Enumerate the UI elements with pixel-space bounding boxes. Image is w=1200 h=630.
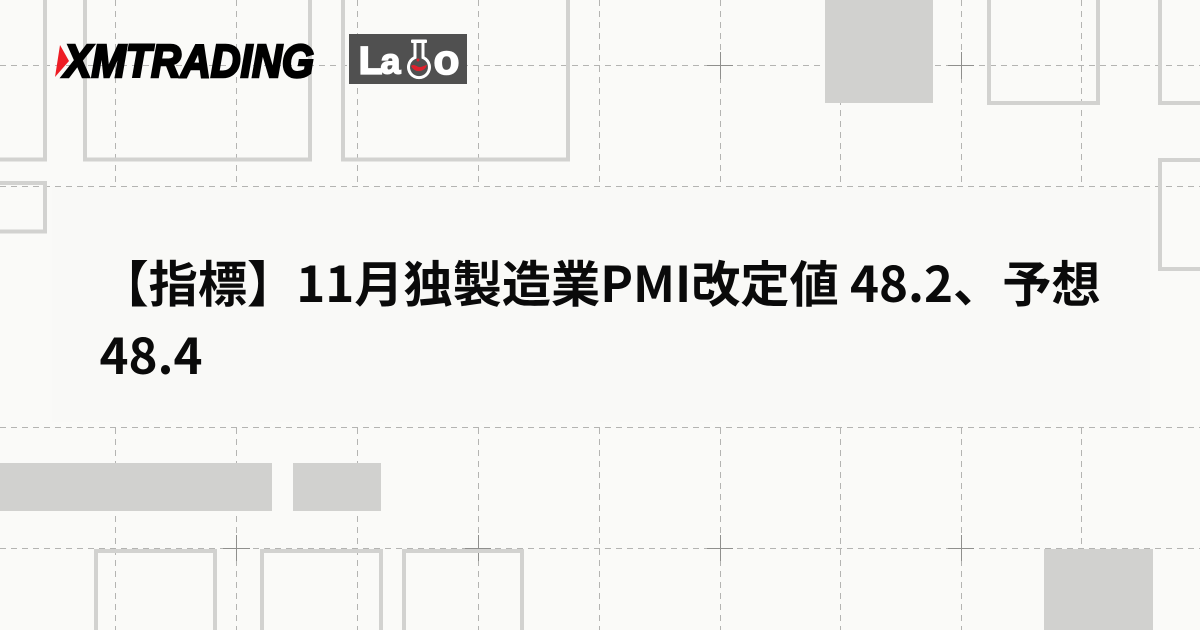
icon: red arrow mark xyxy=(55,45,69,77)
logo: Lab xyxy=(349,34,467,84)
icon: flask xyxy=(407,40,431,79)
letters L and a: L xyxy=(359,40,382,82)
letter o: o xyxy=(434,36,460,83)
logo: XMTRADING xyxy=(55,36,314,86)
title: 【指標】11月独製造業PMI改定値 48.2、予想 48.4 xyxy=(100,246,1101,388)
logo: Lab: a xyxy=(380,40,402,82)
